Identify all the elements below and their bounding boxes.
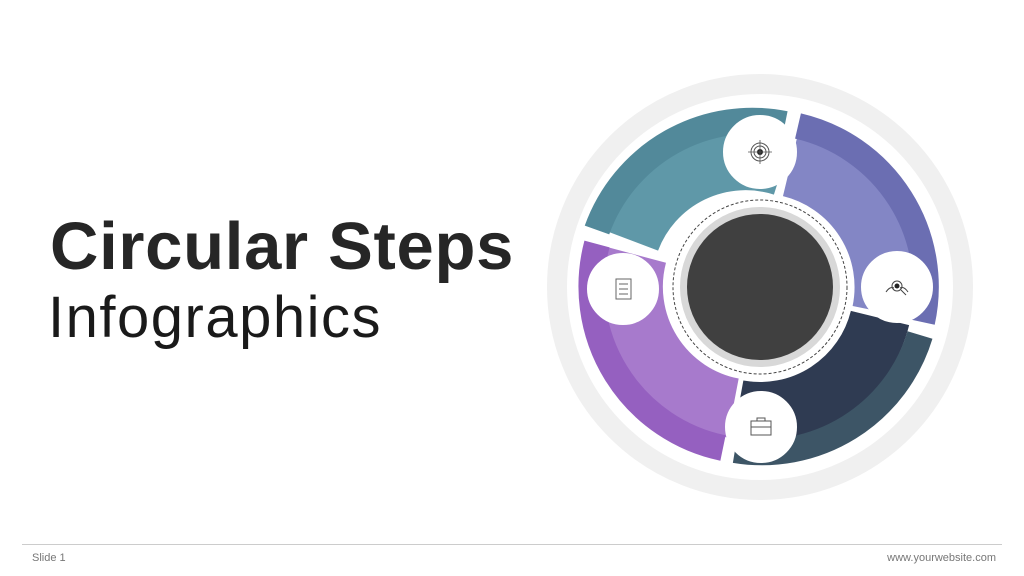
- segment: navy: [735, 318, 920, 452]
- center circle: [668, 195, 852, 379]
- footer line: [22, 544, 1002, 545]
- icon circle: briefcase: [728, 394, 794, 460]
- outer gray ring: [557, 84, 963, 490]
- subtitle: Infographics: [48, 285, 382, 350]
- icon circle: search people: [864, 254, 930, 320]
- title: Circular Steps: [50, 209, 514, 284]
- segment: teal: [597, 121, 785, 240]
- icon circle: target: [726, 118, 794, 186]
- footer: slide number: Slide 1: [32, 552, 66, 564]
- icon circle: checklist: [590, 256, 656, 322]
- segment: violet: [591, 244, 733, 448]
- footer: website: www.yourwebsite.com: [887, 552, 996, 564]
- segment: blue purple: [790, 126, 926, 322]
